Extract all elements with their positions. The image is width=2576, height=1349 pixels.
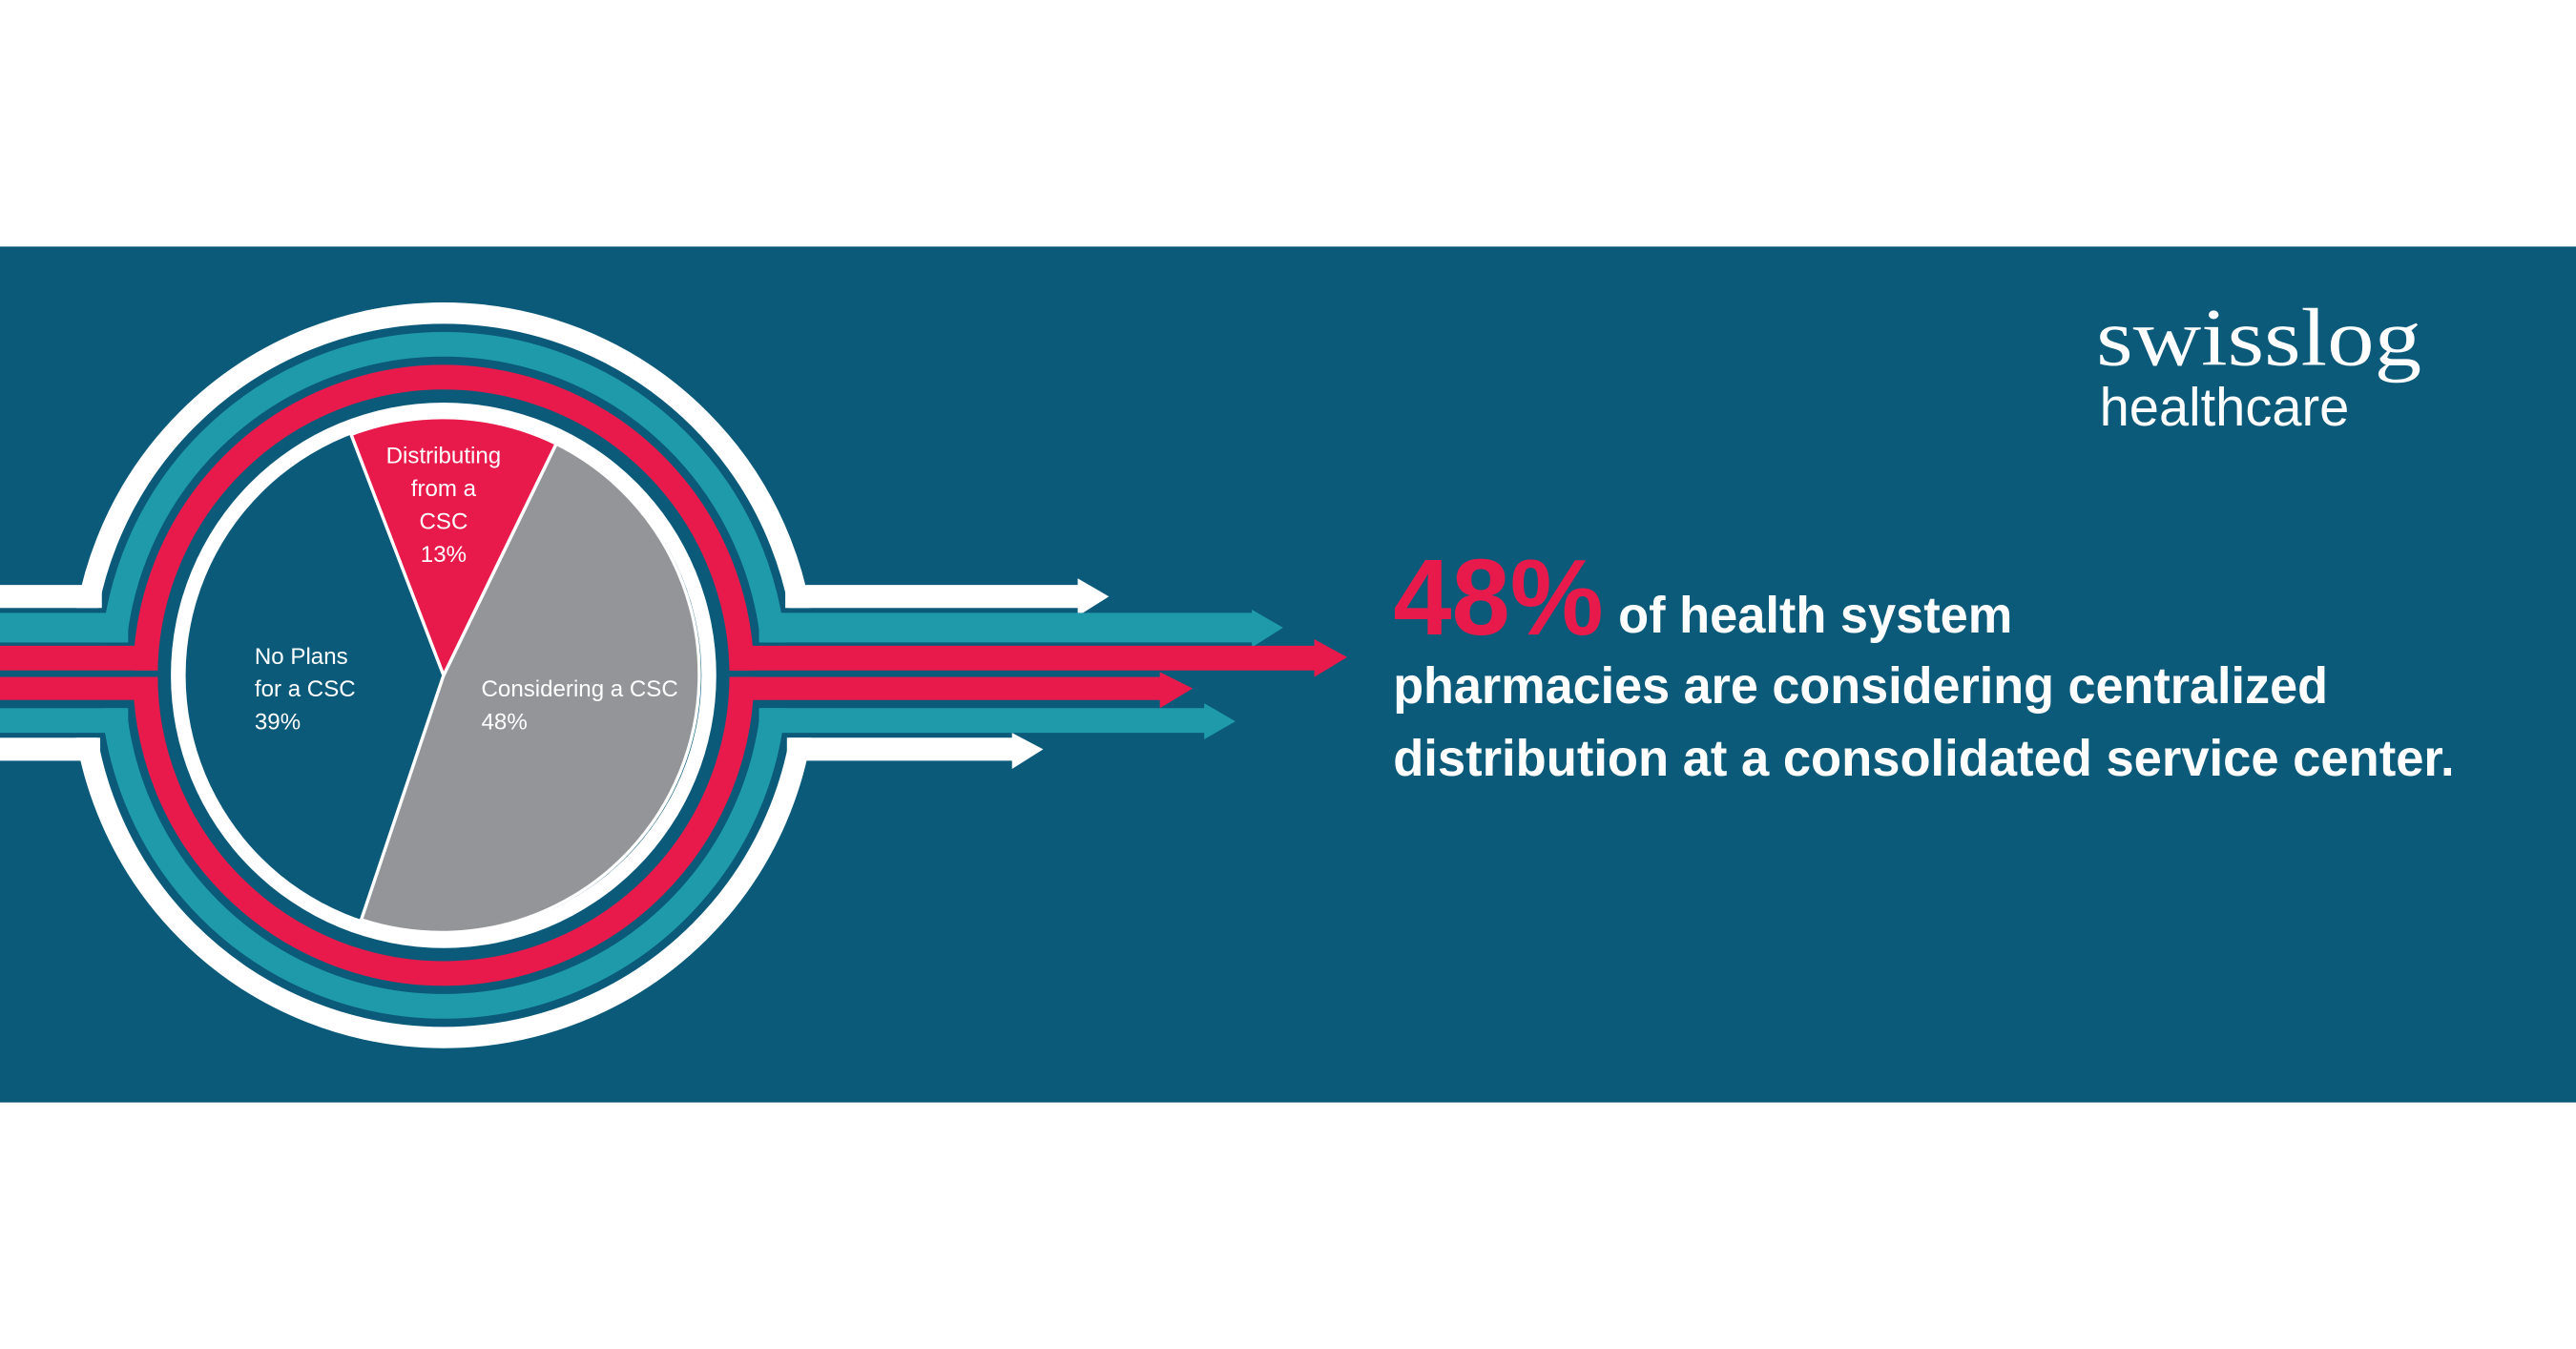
headline text: 48%	[1393, 537, 1604, 658]
headline text: distribution at a consolidated service center.	[1393, 731, 2455, 787]
red band with arrows	[0, 377, 1347, 973]
background band	[0, 246, 2576, 1103]
label: considering: Considering a CSC	[482, 676, 678, 702]
white outer band with arrows	[0, 313, 1109, 1038]
headline text: pharmacies are considering centralized	[1393, 658, 2328, 715]
label: distributing: 13%	[421, 542, 467, 568]
label: considering: 48%	[482, 710, 528, 736]
headline text	[1393, 537, 2455, 787]
label: distributing: from a	[411, 476, 477, 502]
label: distributing: CSC	[419, 509, 467, 535]
teal band with arrows	[0, 344, 1283, 1007]
graphic: ring bands and arrows	[0, 313, 1347, 1038]
slice: distributing 13%	[351, 418, 556, 675]
logo	[2096, 291, 2421, 438]
slice: considering 48%	[362, 444, 699, 932]
logo: swisslog	[2096, 291, 2421, 383]
label: distributing: Distributing	[386, 444, 501, 469]
pie chart	[171, 403, 717, 948]
logo: healthcare	[2100, 378, 2349, 438]
headline text: of health system	[1618, 588, 2012, 644]
label: no plans: 39%	[255, 710, 301, 736]
label: no plans: No Plans	[255, 644, 348, 670]
label: no plans: for a CSC	[255, 676, 356, 702]
